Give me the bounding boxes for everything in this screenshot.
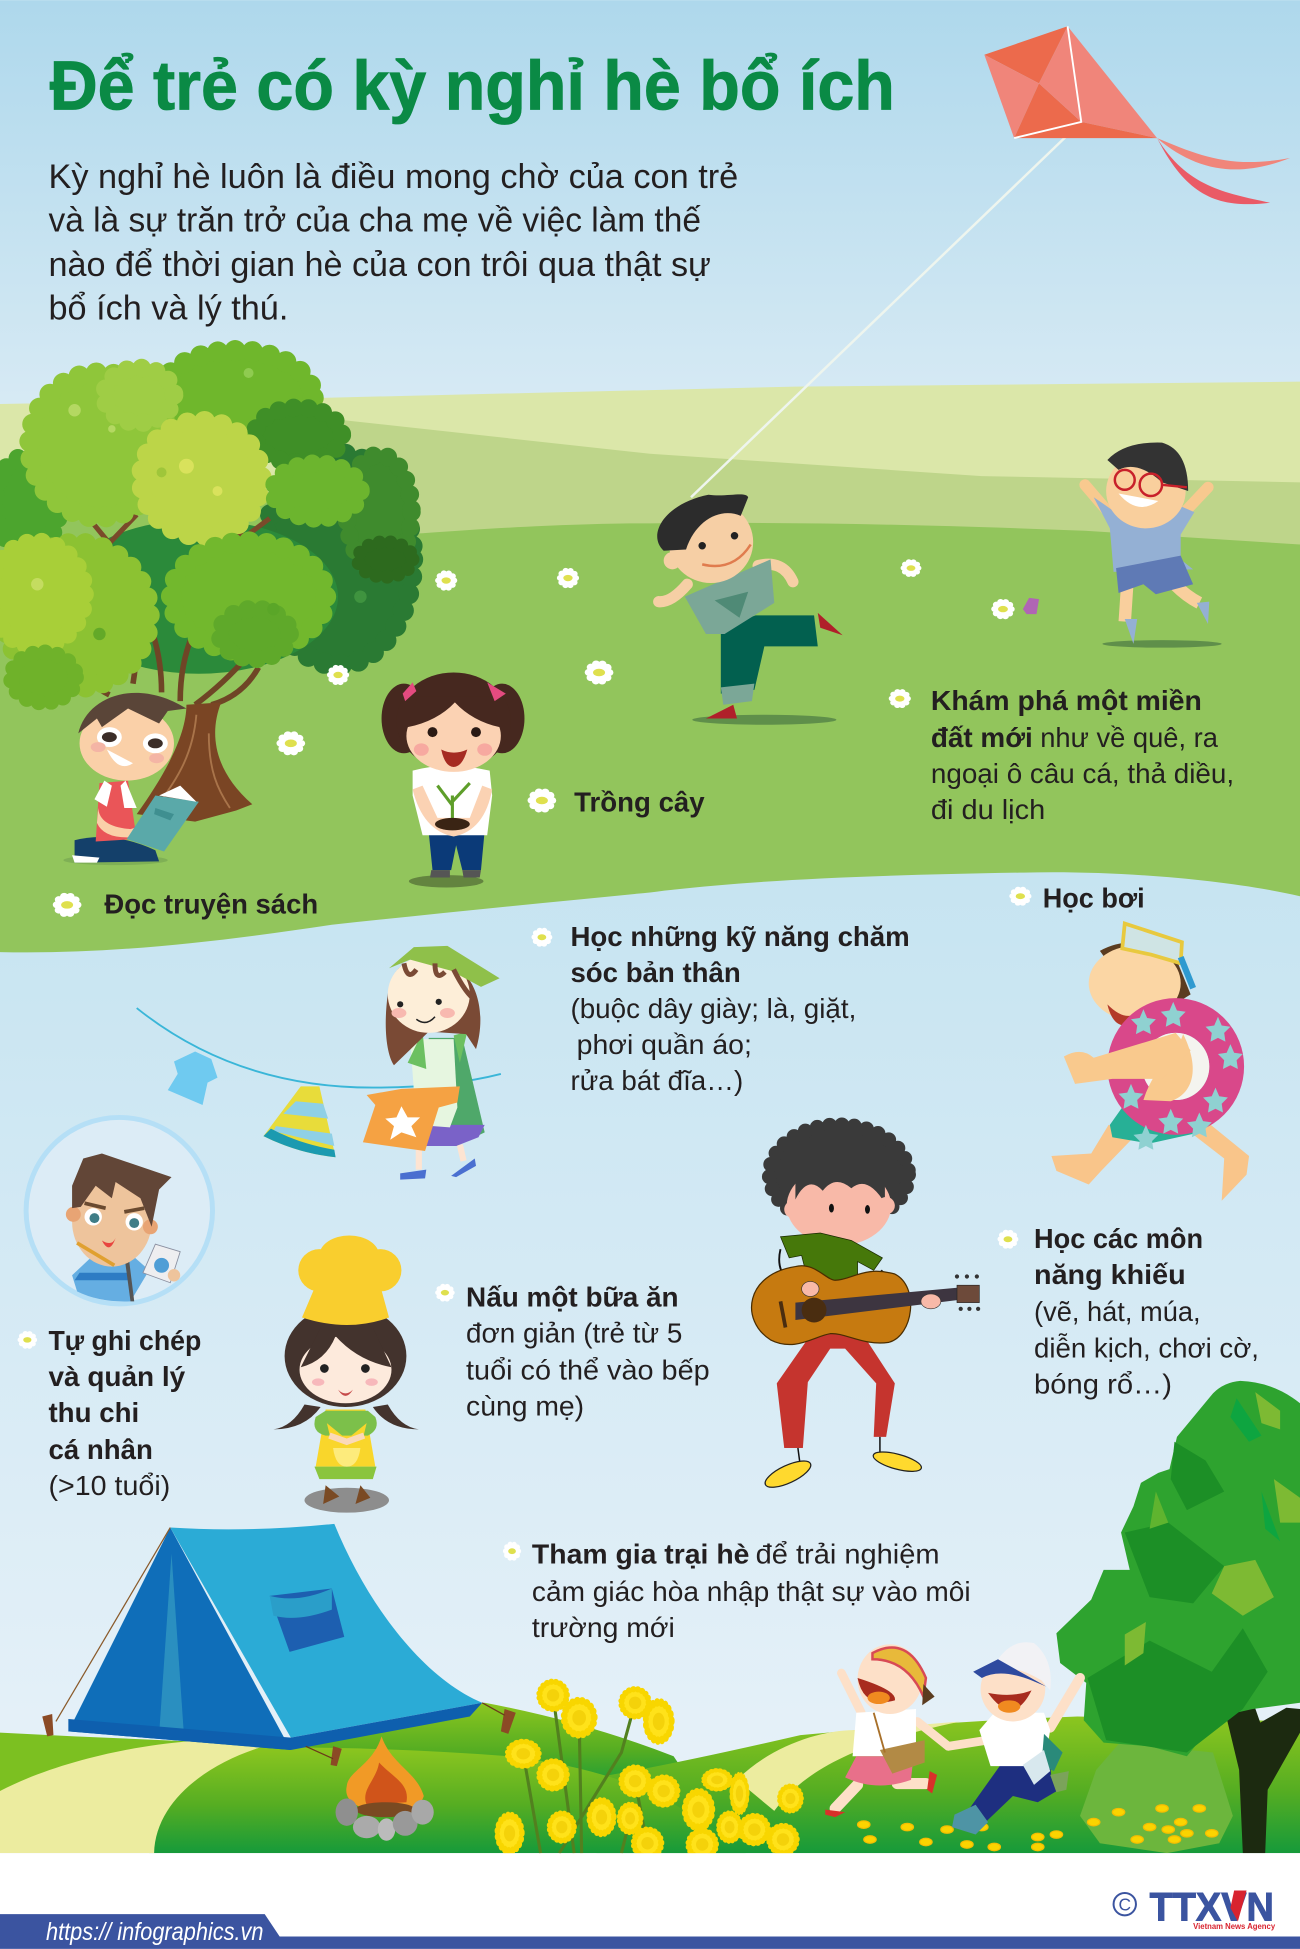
label: exploring: đất mới: [931, 722, 1033, 753]
intro paragraph: Kỳ nghỉ hè luôn là điều mong chờ của con trẻ: [48, 158, 738, 196]
far light hill: [0, 382, 1300, 547]
label: money management: và quản lý: [48, 1361, 186, 1392]
icon: daisy near tree: [438, 573, 454, 588]
label: talents: Học các môn: [1034, 1223, 1203, 1254]
label: summer camp: trường mới: [532, 1612, 675, 1643]
label: planting: Trồng cây: [574, 787, 705, 818]
label: summer camp: cảm giác hòa nhập thật sự vào môi: [532, 1576, 971, 1607]
ground left hill: [0, 1733, 260, 1815]
label: talents: diễn kịch, chơi cờ,: [1034, 1332, 1259, 1363]
title: Để trẻ có kỳ nghỉ hè bổ ích: [50, 46, 895, 124]
ground right hills: [597, 1716, 1300, 1853]
icon: daisy meadow: [281, 734, 301, 752]
label: exploring: [892, 685, 1234, 825]
label: cooking: Nấu một bữa ăn: [466, 1281, 679, 1312]
illustration: boy with glasses: [1085, 442, 1222, 648]
illustration: boy reading: [63, 693, 199, 865]
label: reading: Đọc truyện sách: [104, 889, 318, 920]
illustration: boy in circle with notepad: [26, 1117, 213, 1304]
label: cooking: tuổi có thể vào bếp: [466, 1355, 710, 1386]
ground front hill: [149, 1747, 746, 1853]
source URL: https:// infographics.vn: [46, 1919, 263, 1946]
illustration: girl planting: [382, 672, 524, 888]
label: swimming: Học bơi: [1043, 882, 1145, 913]
label: exploring: đi du lịch: [931, 794, 1045, 825]
label: cooking: đơn giản (trẻ từ 5: [466, 1317, 682, 1348]
label: talents: năng khiếu: [1034, 1259, 1186, 1290]
icon: kite: [984, 26, 1290, 204]
illustration: big tree: [0, 351, 413, 822]
label: talents: bóng rổ…): [1034, 1368, 1172, 1399]
logo: TTXVN: C: [1118, 1894, 1131, 1914]
illustration: yellow flowers: [497, 1682, 1218, 1858]
intro paragraph: [48, 158, 738, 328]
label: cooking: [438, 1281, 710, 1422]
illustration: right tree: [1056, 1381, 1300, 1853]
illustration: campfire: [336, 1736, 434, 1841]
illustration: running boy: [948, 1642, 1080, 1835]
back hill behind campfire: [260, 1703, 696, 1790]
label: summer camp: Tham gia trại hè: [532, 1539, 749, 1570]
label: summer camp: để trải nghiệm: [756, 1539, 940, 1570]
illustration: clothes line and girl: [137, 946, 501, 1180]
label: exploring: ngoại ô câu cá, thả diều,: [931, 758, 1234, 789]
icon: daisy meadow: [995, 602, 1011, 617]
label: self-care skills: Học những kỹ năng chăm: [570, 921, 910, 952]
illustration: chef girl: [273, 1235, 419, 1513]
label: self-care skills: rửa bát đĩa…): [570, 1065, 743, 1096]
intro paragraph: bổ ích và lý thú.: [48, 290, 288, 328]
illustration: boy flying kite: [657, 494, 843, 725]
icon: daisy meadow: [560, 571, 576, 585]
label: exploring: Khám phá một miền: [931, 685, 1202, 716]
label: talents: [1000, 1223, 1259, 1399]
lower pale blue background: [0, 870, 1300, 1864]
label: summer camp: [506, 1539, 971, 1643]
label: self-care skills: phơi quần áo;: [577, 1029, 752, 1060]
label: money management: thu chi: [48, 1397, 139, 1428]
middle hill: [298, 415, 1300, 572]
label: money management: Tự ghi chép: [48, 1325, 201, 1356]
illustration: child with swim ring: [1051, 924, 1249, 1201]
green meadow left edge: [0, 497, 298, 572]
label: self-care skills: [534, 921, 910, 1096]
label: self-care skills: sóc bản thân: [570, 957, 741, 988]
main green meadow: [0, 523, 1300, 952]
label: talents: (vẽ, hát, múa,: [1034, 1296, 1201, 1327]
label: money management: (>10 tuổi): [48, 1470, 170, 1501]
path right: [737, 1721, 961, 1811]
kite string: [691, 122, 1081, 497]
illustration: butterfly: [1023, 598, 1039, 614]
path left: [0, 1741, 260, 1853]
intro paragraph: nào để thời gian hè của con trôi qua thật sự: [48, 246, 711, 284]
logo: TTXVN: TTXVN: [1150, 1885, 1274, 1929]
illustration: boy playing guitar: [752, 1125, 980, 1493]
footer blue bar and URL tab: [0, 1914, 1300, 1949]
icon: daisy meadow: [904, 562, 918, 575]
sky background: [0, 0, 1300, 497]
logo: TTXVN: Vietnam News Agency: [1193, 1921, 1275, 1931]
intro paragraph: và là sự trăn trở của cha mẹ về việc làm thế: [48, 201, 701, 239]
label: self-care skills: (buộc dây giày; là, giặt,: [570, 993, 856, 1024]
illustration: tent: [42, 1524, 516, 1766]
illustration: running girl: [825, 1644, 948, 1817]
label: money management: cá nhân: [48, 1434, 153, 1465]
label: money management: [20, 1325, 201, 1501]
icon: daisy meadow: [330, 668, 346, 682]
label: cooking: cùng mẹ): [466, 1391, 584, 1422]
icon: daisy meadow: [589, 664, 609, 681]
label: exploring: như về quê, ra: [1040, 722, 1218, 753]
footer white band: [0, 1853, 1300, 1949]
